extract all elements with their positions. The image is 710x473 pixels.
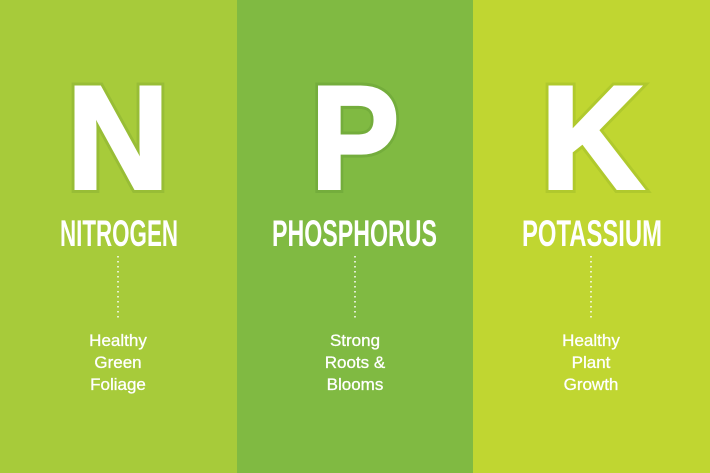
dotted line (354, 256, 356, 320)
panel: potassium (473, 0, 710, 473)
heading: nitrogen: NITROGEN (60, 213, 178, 254)
text: benefit: Growth (564, 375, 618, 394)
text: benefit: Plant (572, 353, 611, 372)
text: benefit: Blooms (327, 375, 383, 394)
letter N: N (67, 56, 169, 219)
text: benefit: Strong (330, 331, 380, 350)
dotted line (590, 256, 592, 320)
panel: nitrogen (0, 0, 237, 473)
letter K: K (541, 56, 643, 219)
text: benefit: Healthy (89, 331, 147, 350)
letter K: K (541, 56, 643, 219)
letter P: P (311, 56, 399, 219)
letter P: P (311, 56, 399, 219)
text: benefit: Healthy (562, 331, 620, 350)
heading: phosphorus: PHOSPHORUS (272, 213, 437, 254)
dotted line (117, 256, 119, 320)
letter N: N (67, 56, 169, 219)
text: benefit: Green (94, 353, 142, 372)
panel: phosphorus (237, 0, 473, 473)
text: benefit: Foliage (90, 375, 146, 394)
text: benefit: Roots & (325, 353, 386, 372)
